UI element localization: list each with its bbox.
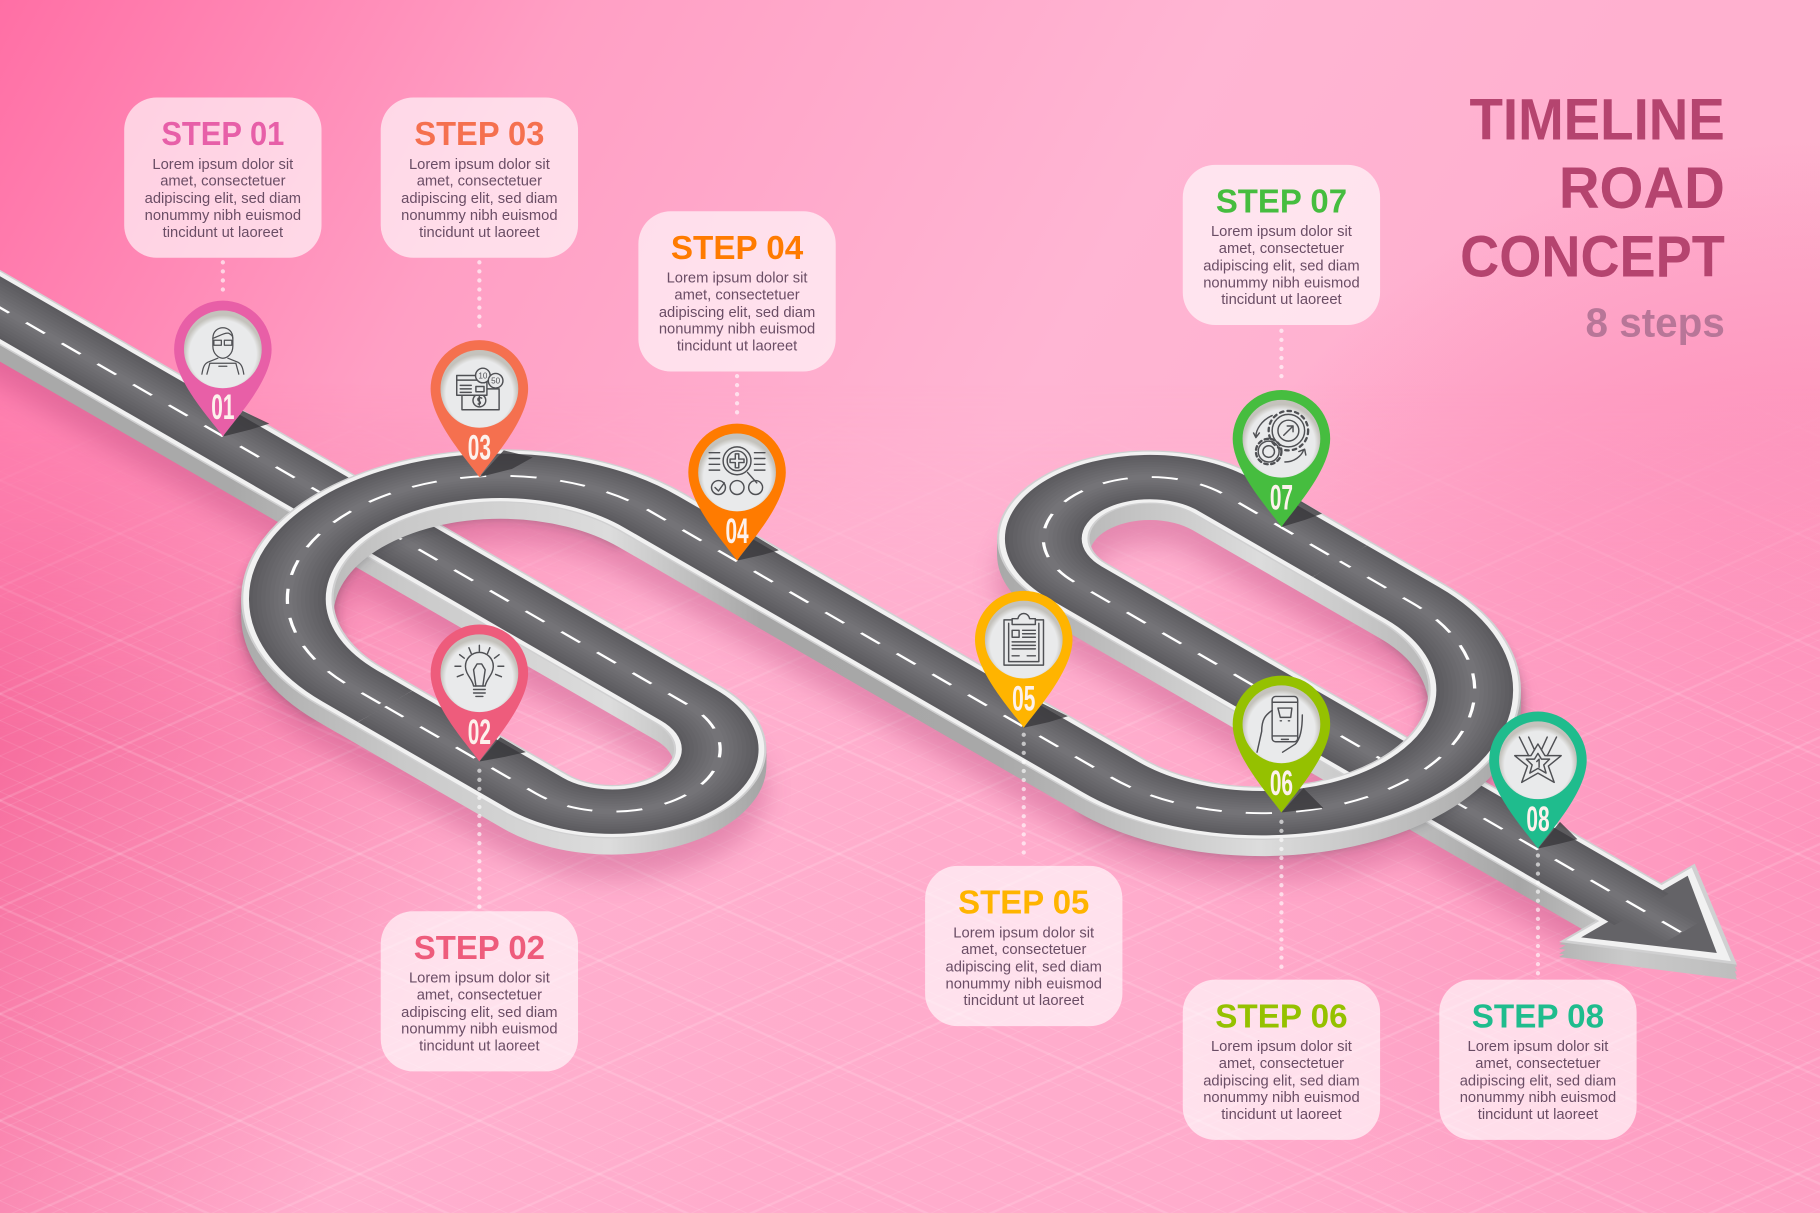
title: ROAD bbox=[1559, 156, 1725, 221]
pin 03: 03 bbox=[468, 429, 491, 468]
panel: step 02: tincidunt ut laoreet bbox=[419, 1038, 540, 1054]
icon: light bulb bbox=[455, 645, 504, 696]
panel: step 05: nonummy nibh euismod bbox=[946, 976, 1102, 992]
panel: step 08 bbox=[1439, 980, 1637, 1140]
panel: step 02: Lorem ipsum dolor sit bbox=[409, 971, 550, 987]
pin 01: 01 bbox=[211, 388, 234, 427]
panel: step 04: amet, consectetuer bbox=[674, 287, 800, 303]
panel: step 07 bbox=[1183, 165, 1380, 325]
icon: star medal bbox=[1515, 737, 1561, 782]
panel: step 02: nonummy nibh euismod bbox=[401, 1022, 558, 1038]
panel: step 07: amet, consectetuer bbox=[1219, 241, 1344, 257]
icon: clipboard bbox=[1004, 613, 1043, 665]
panel: step 04: nonummy nibh euismod bbox=[659, 322, 815, 338]
panel: step 04: adipiscing elit, sed diam bbox=[659, 305, 815, 321]
panel: step 03: STEP 03 bbox=[414, 116, 544, 153]
panel: step 05: tincidunt ut laoreet bbox=[964, 993, 1084, 1009]
panel: step 06: nonummy nibh euismod bbox=[1203, 1090, 1360, 1106]
pin 07: 07 bbox=[1270, 479, 1293, 518]
panel: step 02 bbox=[381, 911, 578, 1071]
panel: step 03: adipiscing elit, sed diam bbox=[401, 191, 558, 207]
title: TIMELINE bbox=[1469, 87, 1725, 152]
panel: step 05: Lorem ipsum dolor sit bbox=[953, 925, 1094, 941]
panel: step 03: amet, consectetuer bbox=[417, 174, 542, 190]
panel: step 01: adipiscing elit, sed diam bbox=[145, 191, 301, 207]
road: arrow end, final straight and small left U-turn bbox=[917, 452, 1820, 1020]
panel: step 07: nonummy nibh euismod bbox=[1203, 275, 1360, 291]
panel: step 04: Lorem ipsum dolor sit bbox=[667, 271, 807, 287]
panel: step 07: Lorem ipsum dolor sit bbox=[1211, 224, 1352, 240]
panel: step 03 bbox=[381, 98, 578, 258]
icon: card, coins and banknote: 50 bbox=[491, 377, 501, 386]
pin 04 bbox=[688, 424, 786, 561]
panel: step 08: tincidunt ut laoreet bbox=[1478, 1107, 1598, 1123]
icon: card, coins and banknote bbox=[457, 368, 503, 410]
panel: step 02: adipiscing elit, sed diam bbox=[401, 1005, 558, 1021]
panel: step 08: adipiscing elit, sed diam bbox=[1460, 1073, 1616, 1089]
panel: step 07: STEP 07 bbox=[1216, 183, 1347, 220]
panel: step 03: nonummy nibh euismod bbox=[401, 208, 558, 224]
pin 08: 08 bbox=[1526, 800, 1550, 839]
panel: step 03: Lorem ipsum dolor sit bbox=[409, 157, 550, 173]
panel: step 02: amet, consectetuer bbox=[417, 987, 542, 1003]
title: CONCEPT bbox=[1460, 224, 1725, 289]
pin 05: 05 bbox=[1012, 679, 1035, 718]
panel: step 06: tincidunt ut laoreet bbox=[1221, 1107, 1342, 1123]
panel: step 01: tincidunt ut laoreet bbox=[163, 225, 283, 241]
panel: step 06: amet, consectetuer bbox=[1219, 1056, 1344, 1072]
panel: step 01: amet, consectetuer bbox=[160, 174, 286, 190]
panel: step 03: tincidunt ut laoreet bbox=[419, 225, 540, 241]
icon: person at laptop bbox=[202, 328, 244, 374]
panel: step 06 bbox=[1183, 980, 1380, 1140]
panel: step 06: Lorem ipsum dolor sit bbox=[1211, 1039, 1352, 1055]
panel: step 08: STEP 08 bbox=[1472, 998, 1604, 1035]
pin 02 bbox=[431, 624, 528, 761]
panel: step 05: amet, consectetuer bbox=[961, 942, 1086, 958]
pin 04: 04 bbox=[725, 512, 749, 551]
pin 02: 02 bbox=[468, 713, 491, 752]
icon: magnifier with checklist bbox=[709, 447, 765, 494]
panel: step 02: STEP 02 bbox=[414, 930, 545, 967]
pin 06 bbox=[1233, 676, 1330, 813]
panel: step 01 bbox=[124, 98, 322, 258]
panel: step 06: adipiscing elit, sed diam bbox=[1203, 1073, 1360, 1089]
panel: step 05: adipiscing elit, sed diam bbox=[946, 960, 1102, 976]
pin 05 bbox=[975, 591, 1072, 728]
panel: step 07: adipiscing elit, sed diam bbox=[1203, 258, 1360, 274]
panel: step 06: STEP 06 bbox=[1215, 998, 1348, 1035]
panel: step 05 bbox=[925, 866, 1122, 1026]
panel: step 08: nonummy nibh euismod bbox=[1460, 1090, 1616, 1106]
panel: step 07: tincidunt ut laoreet bbox=[1221, 292, 1342, 308]
icon: gears with arrows bbox=[1254, 411, 1308, 464]
panel: step 08: Lorem ipsum dolor sit bbox=[1468, 1039, 1608, 1055]
panel: step 01: Lorem ipsum dolor sit bbox=[152, 157, 293, 173]
connector dots bbox=[223, 262, 1538, 975]
panel: step 04: STEP 04 bbox=[671, 230, 803, 267]
icon: card, coins and banknote: 10 bbox=[478, 371, 488, 380]
subtitle: 8 steps bbox=[1586, 300, 1725, 346]
title bbox=[1460, 87, 1725, 289]
panel: step 01: STEP 01 bbox=[161, 116, 284, 153]
pin 03 bbox=[431, 340, 533, 477]
road: left U-turn, long middle straight and big right U-turn bbox=[185, 251, 1577, 1055]
overpass shadow on the road below bbox=[199, 265, 1563, 1052]
panel: step 08: amet, consectetuer bbox=[1475, 1056, 1601, 1072]
pin 06: 06 bbox=[1270, 764, 1293, 803]
icon: phone in hand bbox=[1257, 696, 1302, 752]
road: first straight and right U-turn bbox=[0, 281, 779, 854]
pin 01 bbox=[174, 301, 272, 436]
panel: step 01: nonummy nibh euismod bbox=[145, 208, 301, 224]
panel: step 04: tincidunt ut laoreet bbox=[677, 339, 797, 355]
pin 08 bbox=[1489, 712, 1587, 849]
panel: step 05: STEP 05 bbox=[958, 885, 1089, 922]
panel: step 04 bbox=[638, 211, 836, 371]
pin 07 bbox=[1233, 390, 1330, 527]
